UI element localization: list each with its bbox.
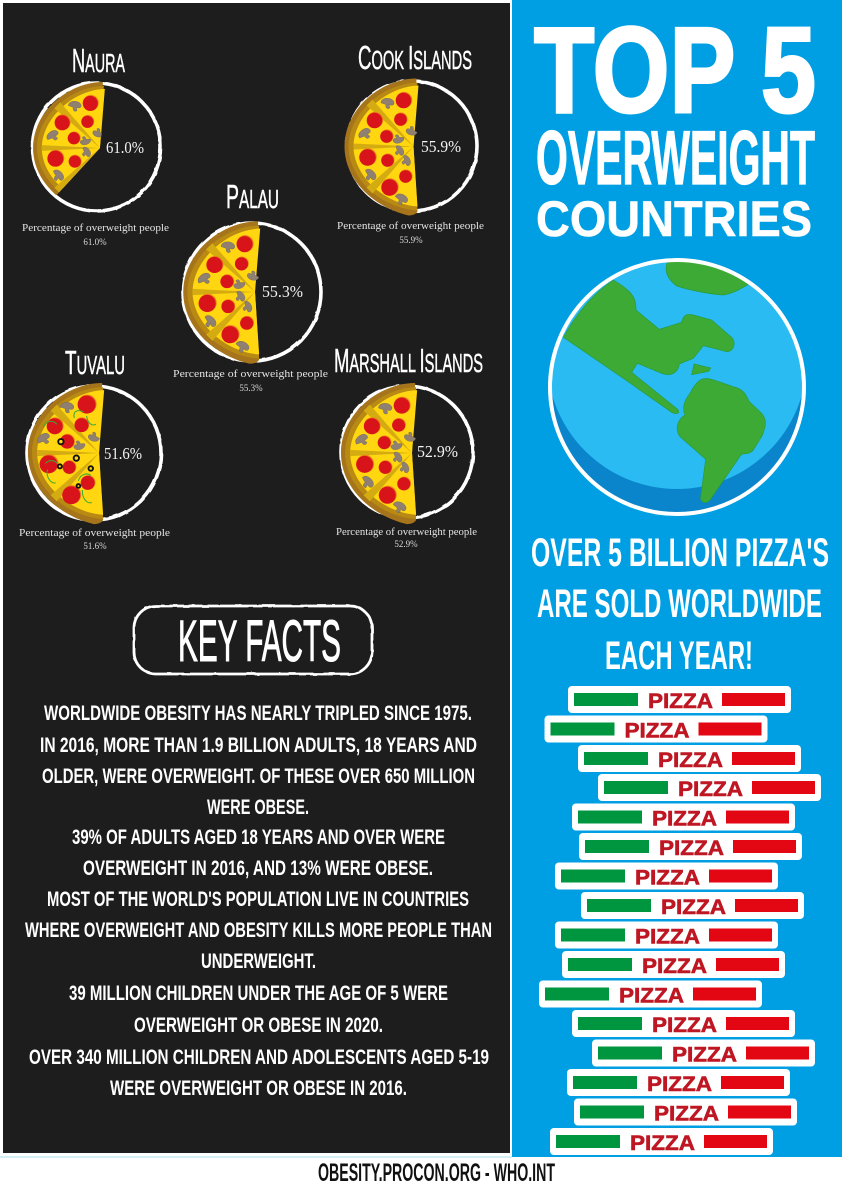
icon: stack of pizza boxes: PIZZA (619, 984, 684, 1008)
text block: key facts: MOST OF THE WORLD'S POPULATION LIVE IN COUNTRIES (47, 888, 469, 911)
pizza slices: Naura (33, 82, 105, 196)
caption: Naura: Percentage of overweight people (22, 223, 169, 234)
title (534, 2, 816, 247)
icon: stack of pizza boxes: PIZZA (652, 806, 717, 830)
value: Naura: 61.0% (106, 138, 144, 157)
text block: key facts: OVERWEIGHT IN 2016, AND 13% WERE OBESE. (83, 857, 433, 880)
icon: globe (548, 258, 806, 516)
text block: pizza statistic (531, 531, 829, 678)
icon: stack of pizza boxes: PIZZA (642, 954, 707, 978)
caption value: Marshall Islands: 52.9% (394, 539, 418, 549)
text block: key facts: WHERE OVERWEIGHT AND OBESITY KILLS MORE PEOPLE THAN (25, 919, 492, 942)
icon: stack of pizza boxes: PIZZA (635, 866, 700, 890)
icon: stack of pizza boxes: PIZZA (654, 1102, 719, 1126)
text block: key facts: WERE OVERWEIGHT OR OBESE IN 2016. (110, 1077, 407, 1100)
caption value: Palau: 55.3% (239, 383, 263, 393)
icon: stack of pizza boxes: PIZZA (672, 1042, 737, 1066)
icon: stack of pizza boxes: PIZZA (661, 895, 726, 919)
text block: key facts: OVER 340 MILLION CHILDREN AND ADOLESCENTS AGED 5-19 (29, 1046, 489, 1069)
title: COUNTRIES (536, 191, 812, 247)
caption value: Cook Islands: 55.9% (399, 235, 423, 245)
caption: Tuvalu: Percentage of overweight people (19, 528, 170, 539)
icon: stack of pizza boxes: PIZZA (624, 718, 690, 742)
chart: Palau (173, 178, 328, 393)
icon: stack of pizza boxes: PIZZA (658, 748, 723, 772)
heading: Tuvalu: TUVALU (65, 344, 125, 381)
pizza slices: Palau (183, 221, 260, 364)
caption: Cook Islands: Percentage of overweight people (337, 221, 484, 232)
value: Cook Islands: 55.9% (421, 137, 461, 156)
pizza slices with toppings: Tuvalu (28, 383, 104, 524)
icon: stack of pizza boxes: PIZZA (659, 836, 724, 860)
text block: key facts: IN 2016, MORE THAN 1.9 BILLION ADULTS, 18 YEARS AND (40, 734, 477, 757)
icon: stack of pizza boxes: PIZZA (630, 1131, 695, 1155)
icon: stack of pizza boxes: PIZZA (678, 777, 743, 801)
icon: stack of pizza boxes: PIZZA (635, 924, 700, 948)
text block: key facts: 39 MILLION CHILDREN UNDER THE AGE OF 5 WERE (69, 982, 448, 1005)
caption: Marshall Islands: Percentage of overweight people (336, 527, 477, 538)
text block: key facts: UNDERWEIGHT. (201, 950, 316, 973)
value: Palau: 55.3% (262, 282, 303, 301)
icon: stack of pizza boxes: PIZZA (647, 1072, 712, 1096)
text block: key facts: WERE OBESE. (207, 796, 309, 819)
panel: blue background (512, 0, 842, 1157)
chart: Marshall Islands (334, 342, 483, 549)
caption: Palau: Percentage of overweight people (173, 368, 328, 380)
pizza slices: Cook Islands (344, 78, 418, 216)
text block: key facts: 39% OF ADULTS AGED 18 YEARS AND OVER WERE (72, 826, 445, 849)
text block: key facts: WORLDWIDE OBESITY HAS NEARLY TRIPLED SINCE 1975. (44, 702, 472, 725)
footer rule (0, 1156, 512, 1158)
text block: key facts: OVERWEIGHT OR OBESE IN 2020. (134, 1014, 383, 1037)
chart: Naura (22, 42, 169, 247)
footer: sources: OBESITY.PROCON.ORG - WHO.INT (318, 1159, 555, 1187)
chart: Cook Islands (337, 39, 484, 245)
heading: key facts (134, 606, 372, 674)
panel: dark background (3, 3, 510, 1153)
heading: key facts: KEY FACTS (178, 609, 341, 674)
heading: Cook Islands: COOK ISLANDS (358, 39, 472, 76)
heading: Palau: PALAU (226, 178, 279, 215)
text block: key facts (25, 702, 492, 1100)
value: Marshall Islands: 52.9% (417, 442, 458, 461)
caption value: Tuvalu: 51.6% (83, 541, 107, 551)
chart: Tuvalu (19, 344, 170, 551)
icon: stack of pizza boxes: PIZZA (652, 1013, 717, 1037)
pizza slices: Marshall Islands (341, 383, 417, 524)
heading: Naura: NAURA (72, 42, 125, 79)
caption value: Naura: 61.0% (83, 237, 107, 247)
value: Tuvalu: 51.6% (104, 444, 142, 463)
icon: stack of pizza boxes: PIZZA (648, 689, 713, 713)
icon: stack of pizza boxes (539, 686, 821, 1155)
heading: Marshall Islands: MARSHALL ISLANDS (334, 342, 483, 379)
text block: key facts: OLDER, WERE OVERWEIGHT. OF THESE OVER 650 MILLION (42, 765, 475, 788)
